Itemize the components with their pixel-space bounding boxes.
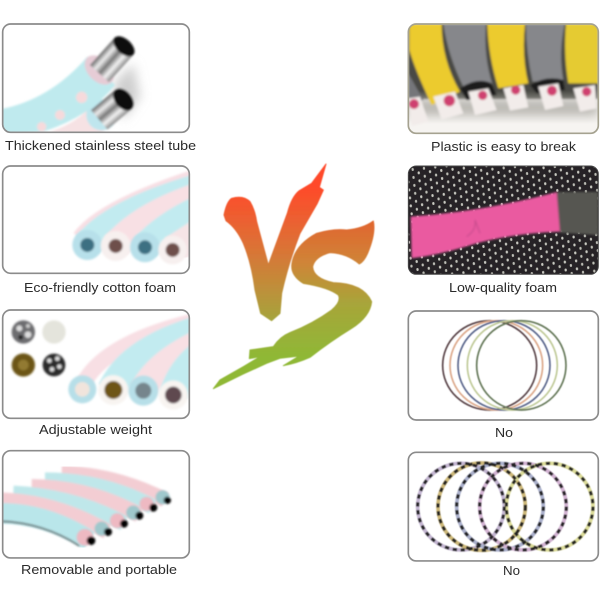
- icon: upper tube: [0, 32, 138, 133]
- label: removable and portable: Removable and portable: [21, 562, 177, 577]
- VS logo: [213, 164, 374, 389]
- letter V: [224, 164, 326, 321]
- panel: thin hoops: [408, 311, 598, 420]
- icon: foam rings: [72, 230, 187, 264]
- label: No (striped hoops): No: [503, 563, 520, 578]
- icon: weight samples: [12, 320, 66, 377]
- panel: cotton foam: [3, 166, 198, 273]
- panel: removable and portable: [0, 451, 189, 558]
- icon: plain hoops: [443, 321, 566, 410]
- panel: adjustable weight: [3, 310, 198, 418]
- panel: low-quality foam: [408, 166, 598, 274]
- icon: filled rings: [68, 375, 188, 410]
- panel: striped hoops: [408, 452, 598, 561]
- label: plastic easy to break: Plastic is easy to break: [431, 139, 577, 154]
- icon: white clips: [408, 83, 597, 126]
- label: steel tube: Thickened stainless steel tube: [5, 138, 196, 153]
- icon: tube ends: [77, 490, 171, 546]
- icon: gray and yellow tubes: [408, 24, 598, 116]
- panel: stainless steel tube: [0, 24, 189, 135]
- label: adjustable weight: Adjustable weight: [39, 422, 152, 437]
- letter S: [213, 221, 374, 389]
- icon: lower tube: [52, 87, 136, 132]
- label: No (thin hoops): No: [495, 425, 513, 440]
- label: low-quality foam: Low-quality foam: [449, 280, 557, 295]
- label: cotton foam: Eco-friendly cotton foam: [24, 280, 176, 295]
- icon: pink foam tube: [411, 192, 598, 258]
- panel: plastic connectors: [408, 24, 598, 133]
- icon: striped hoops: [418, 463, 593, 550]
